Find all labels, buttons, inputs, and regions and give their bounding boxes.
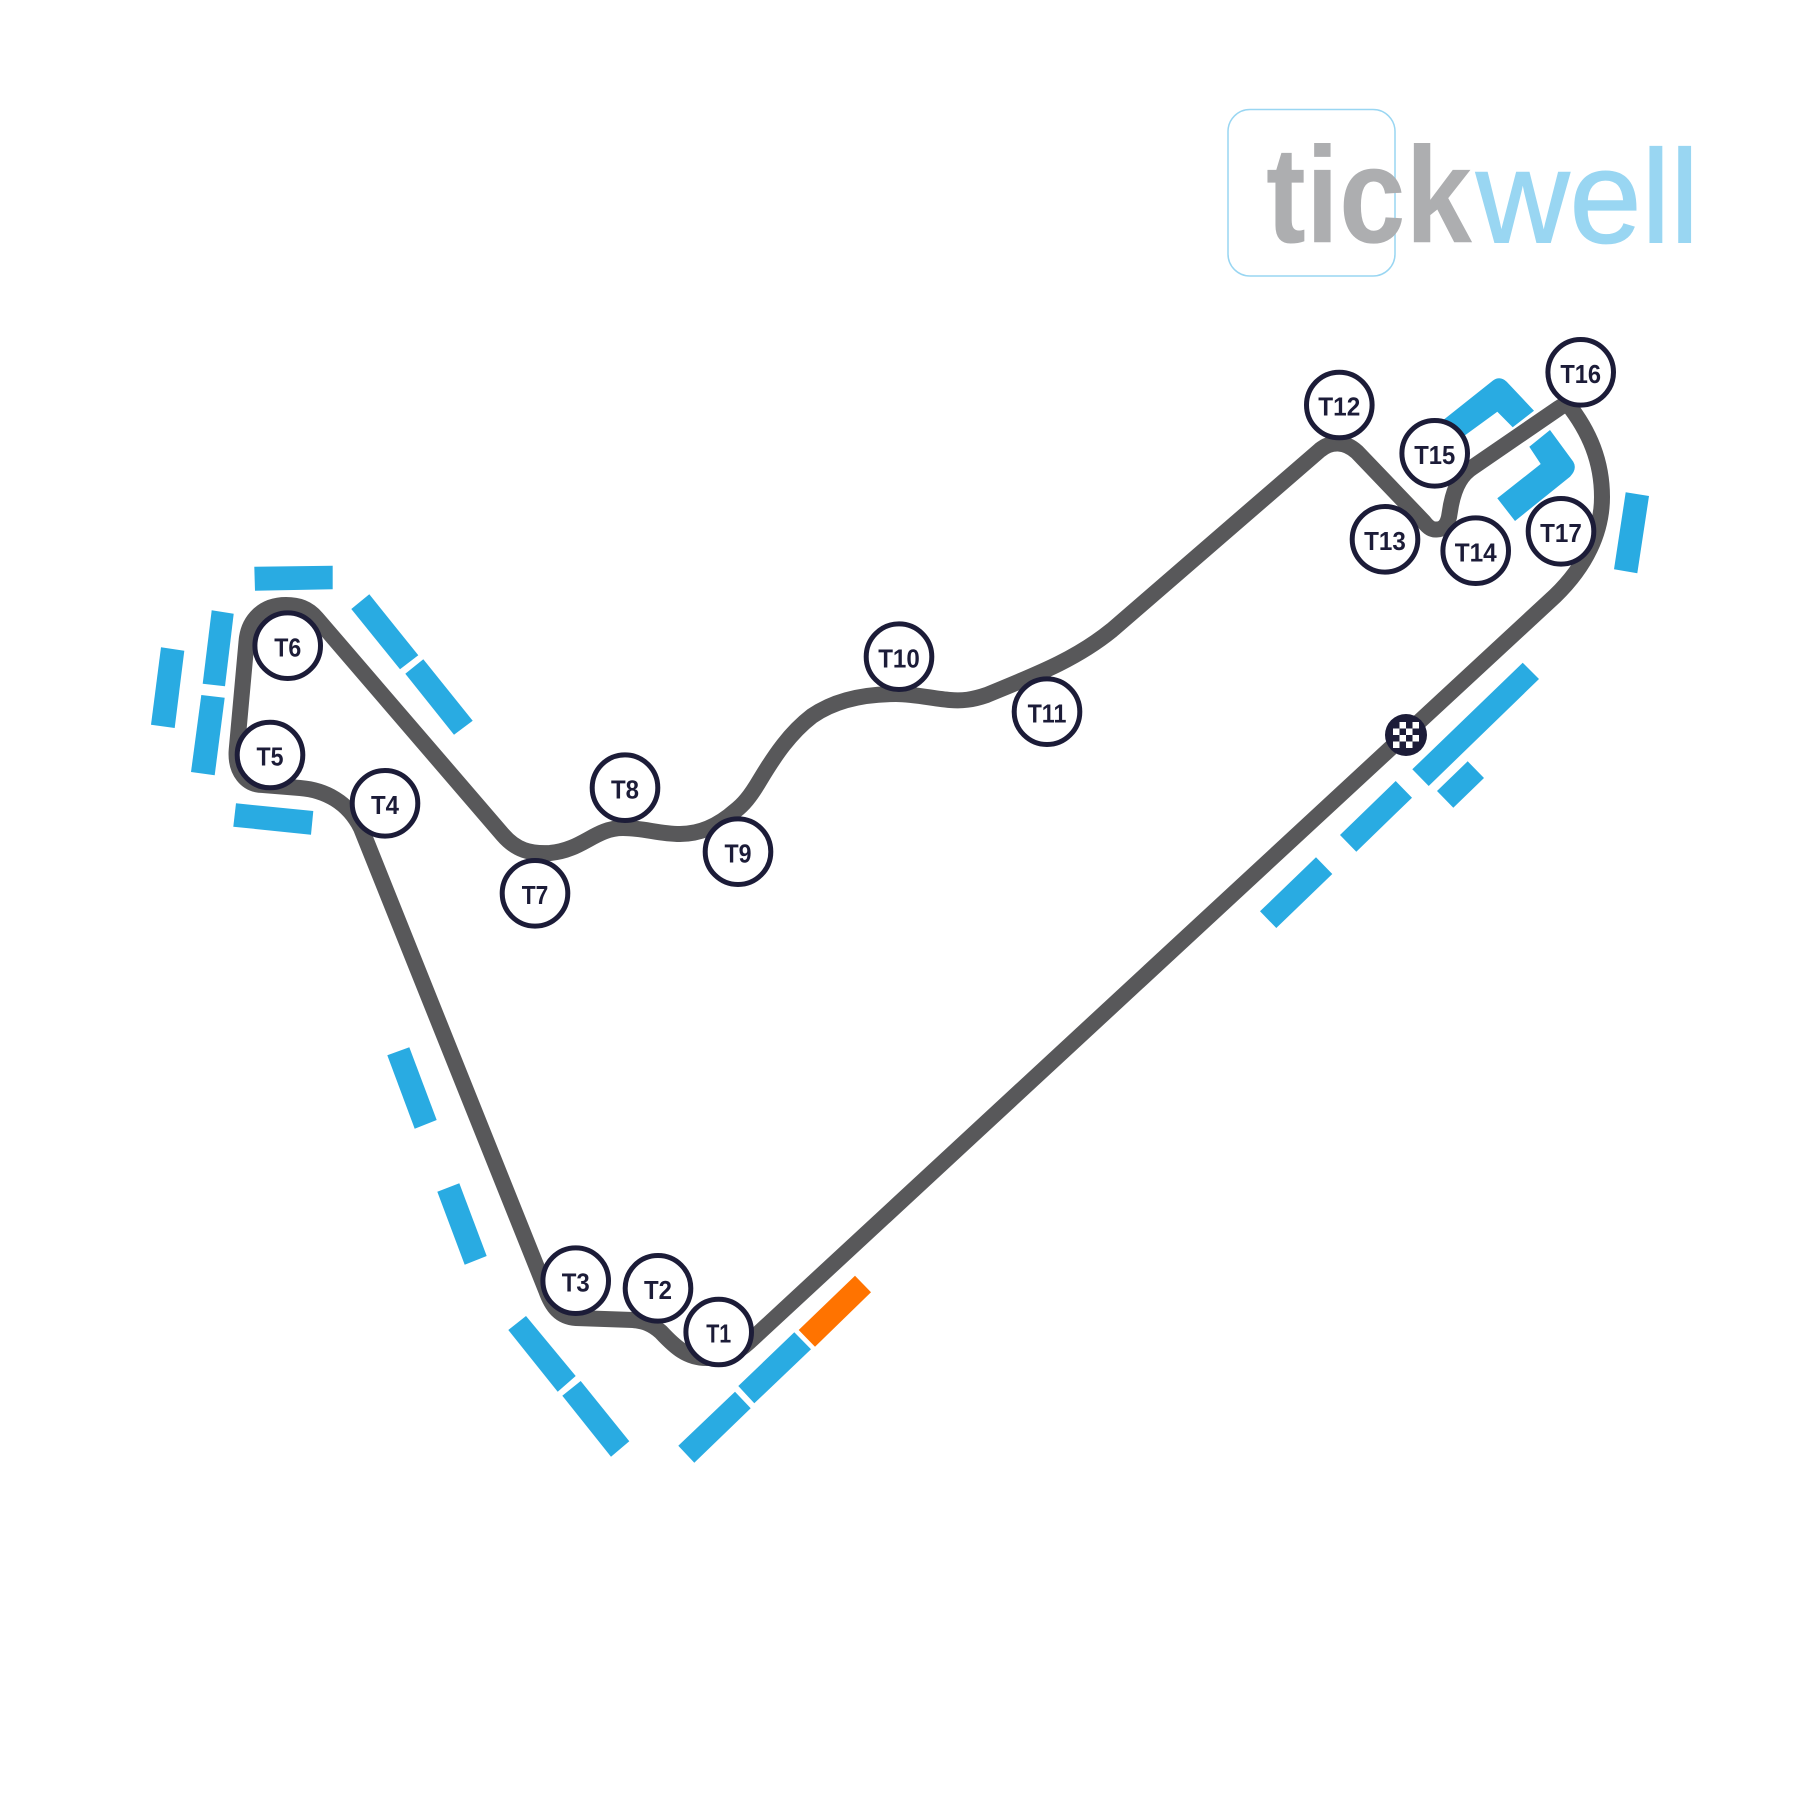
- turn T13: T13: [1364, 526, 1406, 556]
- turn T7: T7: [522, 880, 548, 910]
- turn T5: T5: [256, 742, 284, 772]
- turn T7: [502, 860, 568, 926]
- turn T2: [625, 1256, 691, 1321]
- turn T16: T16: [1560, 359, 1601, 389]
- logo word: tick: tick: [1266, 119, 1473, 272]
- turn T13: [1352, 506, 1418, 572]
- turn T15: [1402, 420, 1467, 486]
- turn T10: [866, 624, 932, 690]
- logo frame: [1228, 110, 1395, 276]
- turn T5: [237, 722, 303, 788]
- turn T17: T17: [1540, 518, 1582, 548]
- turn T11: T11: [1028, 698, 1066, 728]
- turn T1: T1: [706, 1319, 731, 1349]
- turn T12: T12: [1318, 392, 1360, 422]
- finish line marker: [1385, 714, 1427, 756]
- turn T10: T10: [878, 643, 920, 673]
- turn T14: T14: [1455, 537, 1497, 567]
- logo: tickwell: [1228, 110, 1699, 276]
- turn T11: [1014, 679, 1080, 744]
- turn T9: T9: [724, 838, 752, 868]
- turn T1: [686, 1299, 752, 1365]
- turn T3: [543, 1248, 608, 1313]
- logo word: well: well: [1475, 123, 1699, 270]
- barriers: blue run-off sections: [151, 378, 1649, 1463]
- turn T16: [1548, 340, 1613, 405]
- turn T4: [352, 770, 418, 836]
- turn T12: [1306, 372, 1372, 438]
- turn T9: [705, 819, 771, 884]
- turn T2: T2: [644, 1275, 672, 1305]
- turn T4: T4: [371, 790, 399, 820]
- turn T14: [1443, 518, 1508, 584]
- turn T8: T8: [611, 774, 639, 804]
- turn T15: T15: [1414, 440, 1455, 470]
- barrier: orange section: [799, 1276, 871, 1347]
- turn T6: [255, 613, 320, 678]
- turn T3: T3: [562, 1267, 590, 1297]
- turn T6: T6: [274, 632, 301, 662]
- turn T8: [592, 755, 658, 820]
- turn T17: [1528, 498, 1594, 564]
- race track: [237, 403, 1602, 1358]
